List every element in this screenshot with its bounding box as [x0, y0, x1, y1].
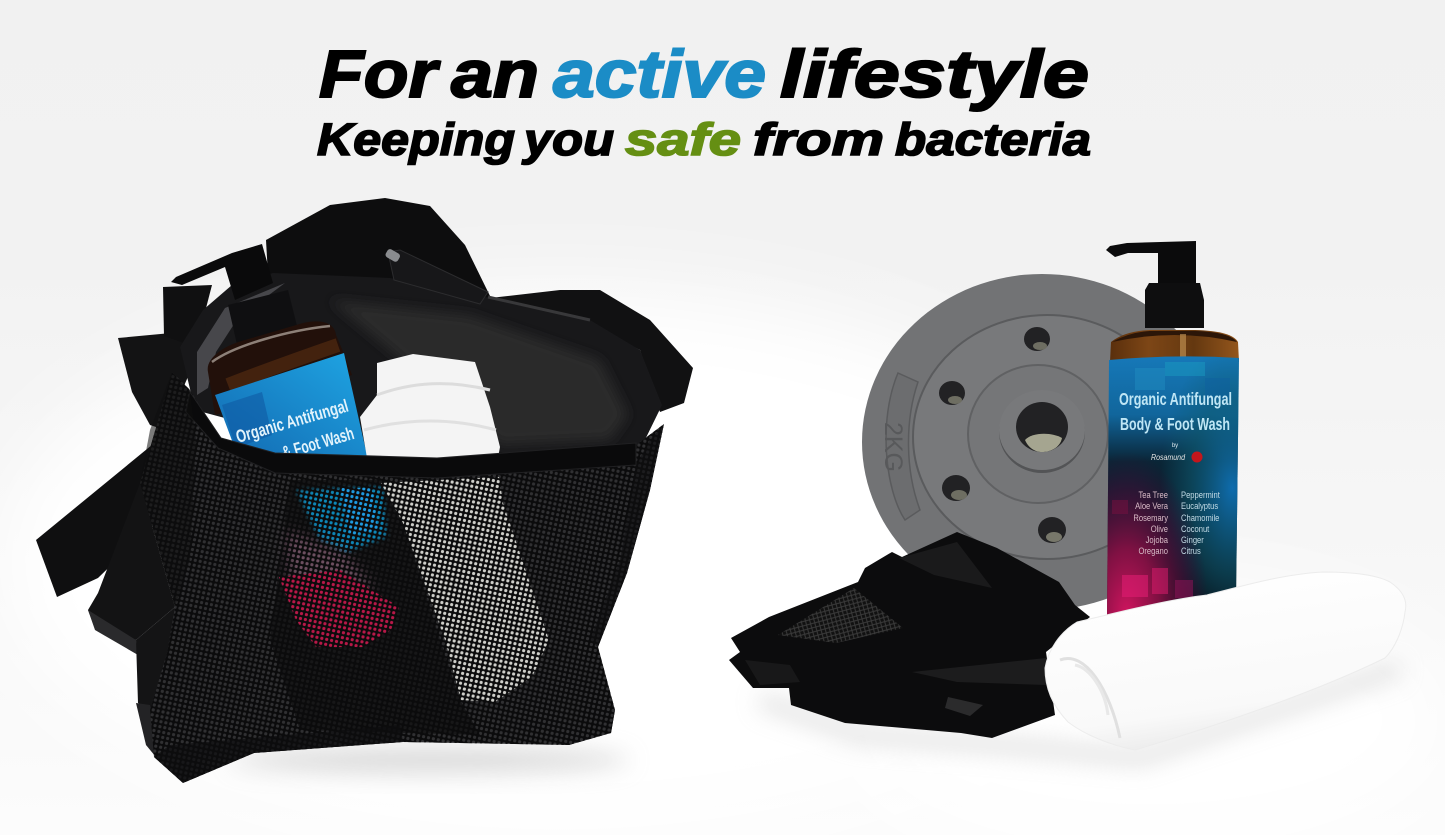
ingredients left: Aloe Vera: [1135, 500, 1168, 511]
plate holes: [939, 327, 1066, 543]
mesh base: [140, 372, 664, 783]
ingredients right: Coconut: [1181, 523, 1210, 534]
rolled towel: [1045, 572, 1406, 750]
pump: [1106, 241, 1196, 283]
photo: weight plate, bottle, gloves and towel: [729, 241, 1406, 758]
towel in bag: [360, 354, 500, 458]
ingredients left: Jojoba: [1146, 534, 1168, 545]
bag zipper: [388, 250, 488, 304]
ingredients right: Ginger: [1181, 534, 1204, 545]
bottle in bag: [171, 244, 368, 463]
towel seen through mesh: [381, 477, 549, 702]
shadow under gloves and towel: [760, 668, 1400, 758]
bag left strap: [36, 440, 168, 597]
bottle: Body & Foot Wash: [1120, 414, 1230, 434]
title: lifestyle: [780, 37, 1089, 112]
bag main upper panel: [180, 273, 662, 465]
ingredients left: Rosemary: [1133, 512, 1169, 523]
title: [319, 37, 1089, 112]
gloves: [729, 532, 1090, 738]
label title: Organic Antifungal: [1119, 389, 1232, 409]
pump collar: [1145, 283, 1204, 328]
mesh overlay: [140, 372, 664, 783]
label text in bag: Organic Antifungal: [234, 396, 351, 447]
amber shoulder: [1110, 330, 1239, 362]
pump collar: [228, 290, 298, 349]
dark shadow inside pocket: [270, 480, 480, 735]
ingredients right: Peppermint: [1181, 489, 1220, 500]
subtitle: you: [522, 114, 614, 165]
subtitle: bacteria: [895, 114, 1091, 165]
mesh pocket: [140, 372, 664, 783]
bag shadow: [230, 747, 630, 773]
pocket hem: [186, 392, 636, 478]
subtitle: safe: [625, 114, 741, 165]
subtitle: Keeping: [317, 114, 515, 165]
plate hub: [999, 391, 1085, 473]
ingredients right: [1181, 489, 1220, 556]
weight plate: [862, 274, 1222, 610]
bag top handle: [266, 198, 491, 310]
pump: [171, 244, 273, 300]
ingredients right: Chamomile: [1181, 512, 1220, 523]
label: [1107, 356, 1239, 620]
bottle shoulder: [208, 321, 352, 415]
title: an: [451, 37, 539, 112]
label in bag: [215, 353, 368, 462]
bottle: [1106, 241, 1239, 620]
bag rear: [88, 483, 175, 640]
bottle in bag: & Foot Wash: [280, 423, 356, 463]
subtitle: [317, 114, 1091, 165]
logo: rose: [1192, 452, 1202, 462]
ingredients right: Citrus: [1181, 545, 1201, 556]
ingredients right: Eucalyptus: [1181, 500, 1218, 511]
ingredients left: [1133, 489, 1169, 556]
photo: gym bag with bottle and towel: [36, 198, 693, 783]
ingredients left: Oregano: [1138, 545, 1168, 556]
plate marking: 2KG: [879, 422, 907, 472]
subtitle: from: [753, 114, 884, 165]
bottle seen through mesh: [296, 487, 387, 553]
title: active: [553, 37, 766, 112]
side seams: [590, 424, 664, 647]
bottle: by: [1172, 443, 1178, 449]
bag right handle: [490, 290, 693, 412]
ingredients left: Tea Tree: [1138, 489, 1168, 500]
title: For: [319, 37, 441, 112]
bottle: Rosamund: [1151, 452, 1185, 462]
ingredients left: Olive: [1151, 523, 1168, 534]
